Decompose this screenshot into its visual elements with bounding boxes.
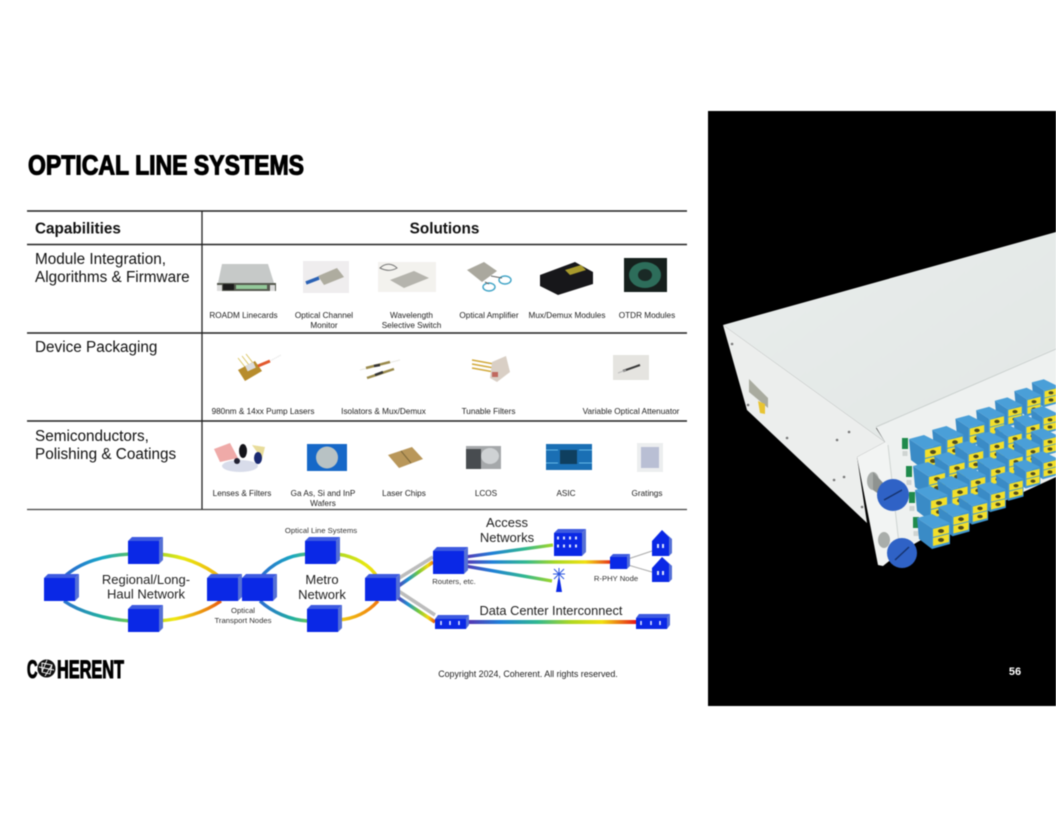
row 2 labels: Tunable Filters [462, 407, 515, 416]
icon: ASIC [546, 444, 592, 470]
network labels: Transport Nodes [215, 616, 272, 625]
row 3 labels: Wafers [310, 499, 336, 508]
icon: LCOS [466, 446, 501, 469]
logo: Coherent: C [27, 656, 38, 684]
R-PHY node [610, 554, 630, 569]
row 3 labels: Laser Chips [382, 489, 426, 498]
network labels: Optical Line Systems [285, 526, 357, 535]
capability: module integration [35, 251, 190, 286]
icon: mux/demux module [540, 262, 593, 295]
port tag labels [905, 451, 916, 536]
row 3 labels: LCOS [475, 489, 498, 498]
heading: solutions: Solutions [410, 220, 479, 238]
regional and metro nodes [44, 537, 468, 632]
network labels: Network [298, 587, 346, 602]
front panel [876, 348, 1056, 553]
mounting flange [857, 442, 899, 566]
network labels [102, 515, 638, 625]
antenna tower [553, 568, 565, 592]
network labels: Access [486, 515, 528, 530]
panel: product photo [708, 111, 1056, 706]
capability: semiconductors: Semiconductors, [35, 428, 149, 445]
side label [749, 379, 768, 414]
regional ring [64, 554, 221, 621]
icon: optical channel monitor [303, 261, 349, 293]
logo: Coherent [27, 656, 124, 684]
data center nodes [435, 614, 670, 629]
row 1 labels [209, 311, 675, 330]
network labels: Regional/Long- [102, 572, 190, 587]
row 3 labels: ASIC [556, 489, 576, 498]
side rivets [732, 344, 862, 507]
icon: isolators [360, 360, 400, 378]
icon: lenses and filters [214, 443, 265, 472]
icon: variable optical attenuator [613, 355, 649, 380]
icon: wafers [307, 444, 347, 471]
access and interconnect links [396, 545, 652, 622]
row 1 labels: Mux/Demux Modules [529, 311, 605, 320]
row 1 labels: Optical Channel [295, 311, 353, 320]
capability: semiconductors: Polishing & Coatings [35, 446, 177, 463]
heading: capabilities: Capabilities [35, 220, 121, 238]
row 1 labels: OTDR Modules [619, 311, 675, 320]
icon: optical amplifier [467, 262, 511, 291]
thumbscrews [867, 472, 917, 568]
row 3 labels: Ga As, Si and InP [291, 489, 356, 498]
metro ring [260, 554, 378, 621]
network labels: Data Center Interconnect [480, 603, 623, 618]
network diagram [44, 515, 672, 632]
row 1 labels: ROADM Linecards [209, 311, 278, 320]
row 2 labels [212, 407, 680, 416]
houses [652, 530, 672, 582]
network labels: R-PHY Node [594, 574, 638, 583]
row 1 labels: Wavelength [390, 311, 433, 320]
row 1 labels: Monitor [310, 321, 338, 330]
chassis top [723, 232, 1056, 442]
chassis side [723, 325, 885, 523]
capability: device packaging: Device Packaging [35, 339, 157, 356]
row 3 labels [213, 489, 662, 508]
capabilities and solutions table [27, 211, 687, 510]
network labels: Networks [480, 530, 535, 545]
icon: pump laser [238, 354, 281, 381]
copyright: Copyright 2024, Coherent. All rights reserved. [438, 669, 618, 679]
green port tags [905, 438, 916, 528]
network labels: Routers, etc. [432, 577, 476, 586]
row 3 labels: Lenses & Filters [213, 489, 271, 498]
page number: 56 [1009, 666, 1021, 678]
capability: module integration: Algorithms & Firmware [35, 269, 190, 286]
icon: OTDR module [624, 258, 667, 292]
capability: semiconductors [35, 428, 177, 463]
icon: laser chips [388, 447, 423, 468]
office building [554, 529, 586, 556]
row 3 labels: Gratings [632, 489, 662, 498]
row 2 labels: 980nm & 14xx Pump Lasers [212, 407, 314, 416]
icon: gratings [637, 443, 663, 472]
network labels: Optical [231, 606, 255, 615]
icon: tunable filter [472, 356, 510, 382]
row 2 labels: Isolators & Mux/Demux [341, 407, 426, 416]
icon: ROADM linecard [217, 264, 276, 291]
row 1 labels: Optical Amplifier [459, 311, 519, 320]
capability: module integration: Module Integration, [35, 251, 166, 268]
logo: Coherent: HERENT [57, 656, 124, 684]
row 2 labels: Variable Optical Attenuator [583, 407, 680, 416]
row 1 labels: Selective Switch [382, 321, 442, 330]
icon: wavelength selective switch [378, 262, 436, 292]
fiber connector modules [909, 379, 1056, 549]
title: OPTICAL LINE SYSTEMS [28, 150, 304, 180]
network labels: Metro [305, 572, 339, 587]
network labels: Haul Network [107, 586, 186, 602]
